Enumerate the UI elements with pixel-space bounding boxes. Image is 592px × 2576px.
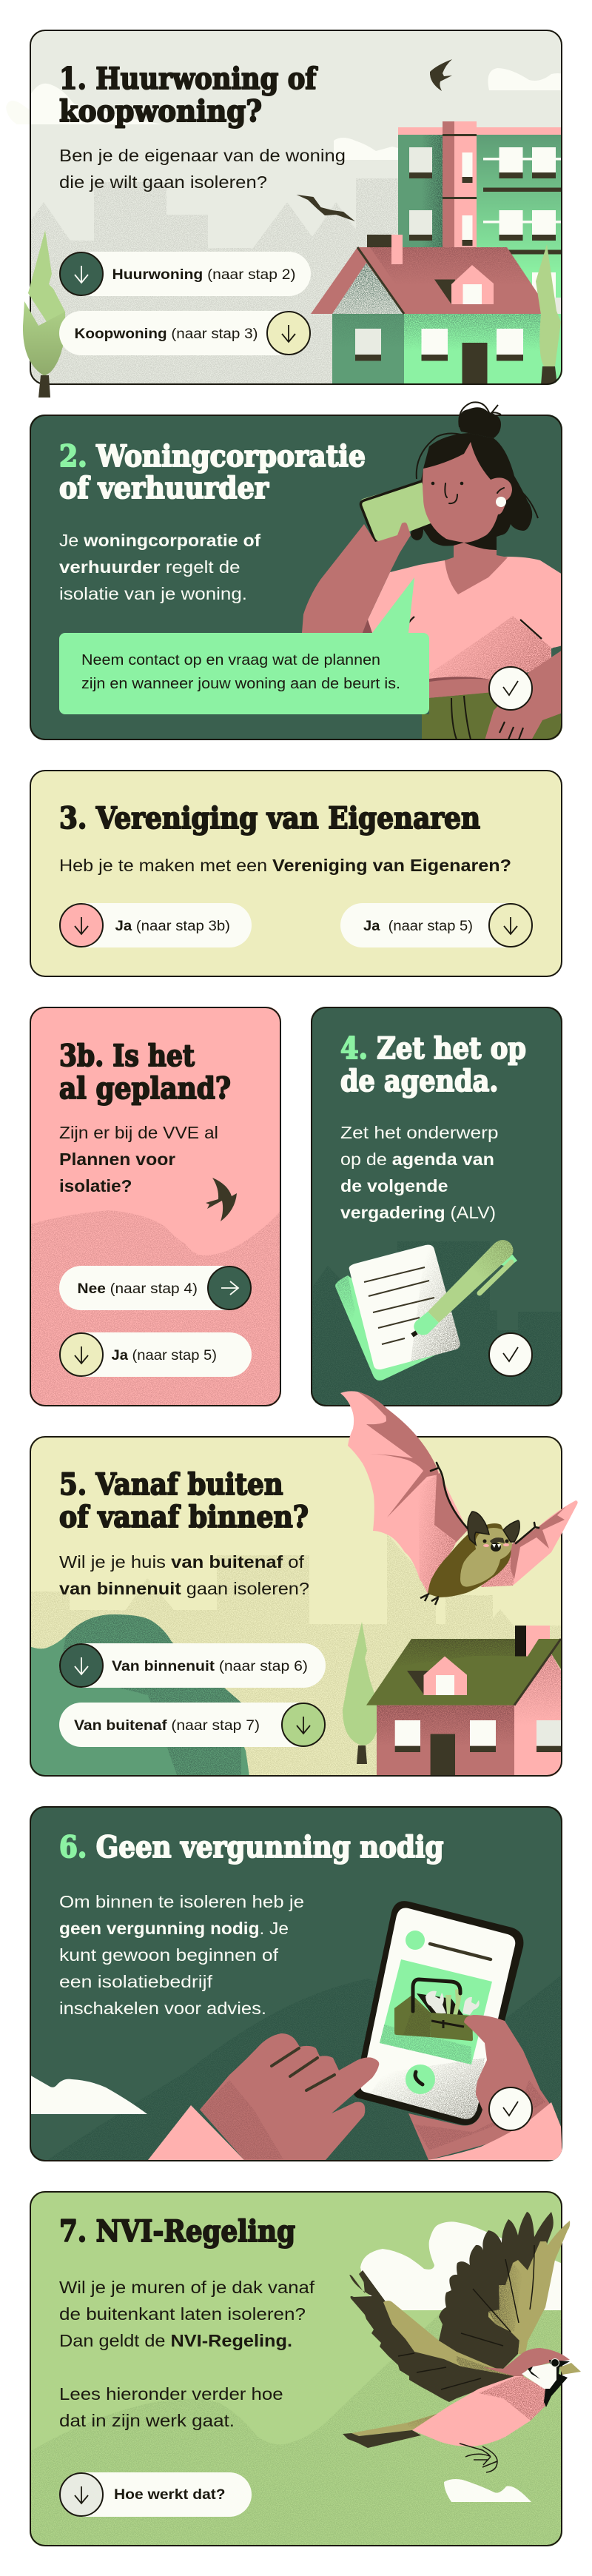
illustration: grain hill [30, 1210, 281, 1406]
button: nee naar stap 4: Nee (naar stap 4) [77, 1281, 198, 1297]
text block: Plannen voor [59, 1150, 175, 1169]
icon: left tree [23, 230, 65, 398]
text block [59, 531, 260, 603]
text block: inschakelen voor advies. [59, 1999, 266, 2018]
left hand [200, 2033, 379, 2160]
panel: step 3 vereniging van eigenaren [30, 771, 562, 976]
left sleeve [148, 2105, 244, 2160]
illustration: bat [340, 1391, 578, 1605]
text block: de volgende [340, 1176, 448, 1195]
illustration: landscape with house [30, 1534, 562, 1777]
icon: swift [430, 59, 452, 91]
heading: 7. NVI-Regeling [59, 2214, 295, 2249]
heading [340, 1031, 526, 1099]
illustration: woman on phone [302, 402, 538, 633]
text block: isolatie? [59, 1176, 132, 1195]
heading: 5. Vanaf buiten [59, 1467, 283, 1502]
panel: step 2 woningcorporatie of verhuurder [30, 402, 562, 740]
icon: bat silhouette [296, 195, 355, 221]
text block [340, 1123, 499, 1222]
panel: step 6 geen vergunning nodig [30, 1806, 562, 2161]
text block: Heb je te maken met een Vereniging van Eigenaren? [59, 856, 511, 875]
heading: 2. Woningcorporatie [59, 439, 366, 474]
text block [59, 1123, 218, 1195]
illustration: dark skyline [311, 1241, 562, 1406]
text block: Wil je je huis van buitenaf of [59, 1552, 304, 1572]
border [30, 2192, 562, 2546]
icon: check badge [489, 1333, 532, 1376]
text block: de buitenkant laten isoleren? [59, 2304, 306, 2324]
icon: swift [206, 1178, 237, 1221]
text block: die je wilt gaan isoleren? [59, 172, 267, 192]
icon: notepad [335, 1245, 460, 1381]
border [30, 30, 562, 384]
heading: of verhuurder [59, 471, 269, 506]
text block: verhuurder regelt de [59, 557, 240, 577]
text block [59, 2278, 315, 2430]
icon: pen [412, 1240, 517, 1335]
button: ja naar stap 5 [59, 1332, 252, 1377]
illustration: flying sparrow [343, 2212, 581, 2472]
text block [59, 1892, 304, 2018]
button: van binnenuit: Van binnenuit (naar stap 6) [112, 1659, 308, 1674]
text block: een isolatiebedrijf [59, 1972, 213, 1991]
text block: isolatie van je woning. [59, 584, 247, 603]
illustration: clouds and hill [30, 2221, 562, 2546]
heading [59, 439, 366, 506]
button: ja naar stap 3b [59, 903, 252, 947]
heading: 6. Geen vergunning nodig [59, 1830, 444, 1865]
border [30, 1807, 562, 2161]
heading: of vanaf binnen? [59, 1500, 309, 1534]
button: ja naar stap 3b: Ja (naar stap 3b) [115, 919, 230, 934]
text block: op de agenda van [340, 1150, 494, 1169]
heading [59, 1039, 231, 1106]
text block: Je woningcorporatie of [59, 531, 260, 550]
phone [354, 1901, 523, 2125]
button: huurwoning [59, 252, 311, 296]
text block: Zijn er bij de VVE al [59, 1123, 218, 1142]
icon: check badge [489, 2087, 532, 2130]
text block: Zet het onderwerp [340, 1123, 499, 1142]
callout: zijn en wanneer jouw woning aan de beurt is. [81, 676, 400, 692]
text block [59, 146, 346, 192]
border [30, 1437, 562, 1776]
panel: step 1 huurwoning of koopwoning [6, 30, 562, 398]
button: van buitenaf [59, 1703, 326, 1747]
panel: step 3b is het al gepland [30, 1007, 281, 1406]
right hand [408, 2015, 551, 2160]
button: hoe werkt dat [59, 2472, 252, 2517]
text block [59, 1552, 309, 1598]
text block: Lees hieronder verder hoe [59, 2384, 283, 2404]
text block: Om binnen te isoleren heb je [59, 1892, 304, 1911]
button: koopwoning [59, 311, 311, 355]
heading: de agenda. [340, 1064, 499, 1099]
button: ja naar stap 5: Ja (naar stap 5) [111, 1348, 217, 1364]
button: van binnenuit [59, 1643, 326, 1688]
text block: dat in zijn werk gaat. [59, 2411, 235, 2430]
icon: check badge [489, 667, 532, 710]
illustration: body of woman [368, 537, 562, 740]
callout [59, 577, 429, 714]
heading [59, 61, 318, 129]
text block: Dan geldt de NVI-Regeling. [59, 2331, 292, 2350]
border [30, 415, 562, 739]
button: huurwoning: Huurwoning (naar stap 2) [112, 267, 296, 283]
text block: van binnenuit gaan isoleren? [59, 1579, 309, 1598]
heading [59, 1467, 309, 1534]
heading: 3. Vereniging van Eigenaren [59, 801, 480, 836]
illustration: town scene with flats and house [30, 68, 562, 385]
illustration: hands holding phone [148, 1901, 562, 2160]
illustration: hill and cloud [30, 1974, 562, 2161]
panel: step 7 nvi-regeling [30, 2191, 581, 2546]
button: van buitenaf: Van buitenaf (naar stap 7) [74, 1718, 260, 1734]
cloud outside left edge [6, 101, 31, 124]
button: koopwoning: Koopwoning (naar stap 3) [74, 326, 258, 342]
heading: al gepland? [59, 1071, 231, 1106]
border [312, 1007, 562, 1406]
heading: 3b. Is het [59, 1039, 195, 1073]
text block: geen vergunning nodig . Je [59, 1919, 289, 1938]
heading: koopwoning? [59, 94, 262, 129]
heading: 1. Huurwoning of [59, 61, 318, 96]
border [30, 1007, 280, 1406]
right sleeve [428, 2102, 562, 2160]
text block: Wil je je muren of je dak vanaf [59, 2278, 315, 2297]
heading: 4. Zet het op [340, 1031, 526, 1066]
panel: step 4 zet het op de agenda [311, 1007, 562, 1406]
button: hoe werkt dat: Hoe werkt dat? [114, 2487, 226, 2503]
button: nee naar stap 4 [59, 1266, 252, 1310]
text block: Ben je de eigenaar van de woning [59, 146, 346, 165]
button: ja naar stap 5: Ja (naar stap 5) [363, 919, 473, 934]
text block: kunt gewoon beginnen of [59, 1945, 279, 1965]
text block: vergadering (ALV) [340, 1203, 496, 1222]
button: ja naar stap 5 [340, 903, 533, 947]
callout: Neem contact op en vraag wat de plannen [81, 652, 380, 668]
panel: step 5 vanaf buiten of vanaf binnen [30, 1391, 578, 1777]
